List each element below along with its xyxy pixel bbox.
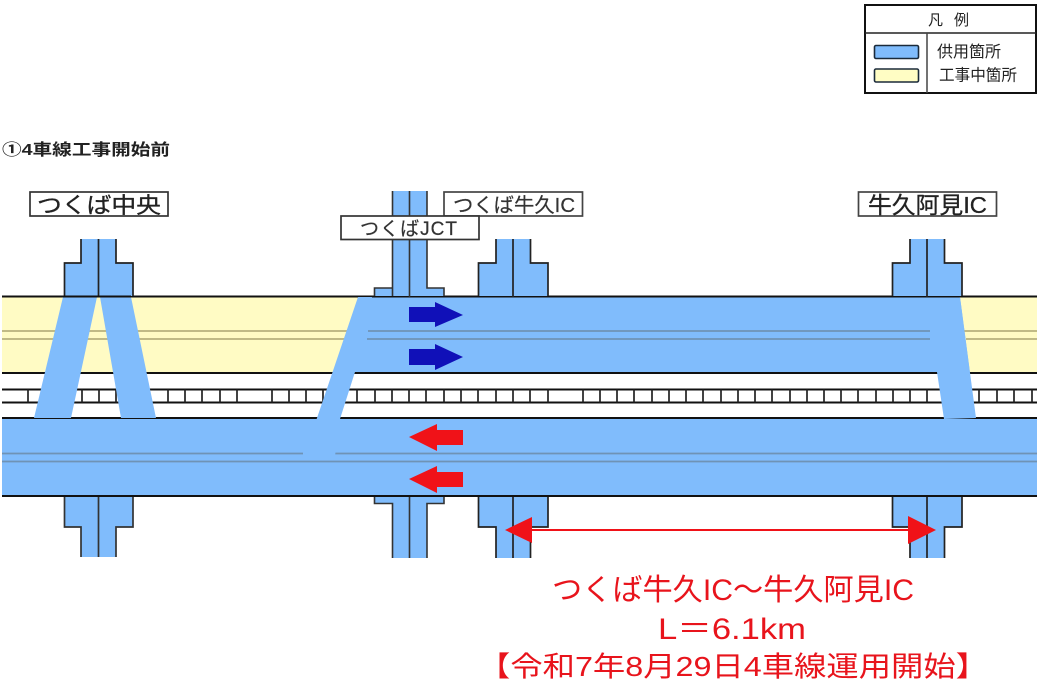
label: つくばJCT: つくばJCT bbox=[360, 218, 457, 240]
callout: section, length and opening date bbox=[478, 574, 988, 682]
interchange: 牛久阿見IC north outline bbox=[892, 239, 962, 297]
legend swatch: in service bbox=[874, 46, 918, 58]
junction: つくばJCT north outline bbox=[374, 191, 444, 297]
crossover ramp: つくば中央 right bbox=[100, 297, 156, 418]
crossover ramp: つくばJCT bbox=[304, 297, 372, 456]
carriageway edge lines bbox=[2, 296, 1037, 496]
junction: つくばJCT north fill bbox=[374, 191, 444, 296]
interchange: つくば中央 north outline bbox=[64, 239, 133, 297]
section span arrow bbox=[505, 516, 936, 544]
heading: ①4車線工事開始前 bbox=[2, 140, 170, 159]
legend swatch: under construction bbox=[874, 69, 918, 82]
label: つくば牛久IC: つくば牛久IC bbox=[453, 194, 575, 217]
interchange: 牛久阿見IC south fill bbox=[892, 497, 962, 558]
median bbox=[2, 390, 1037, 402]
road plan bbox=[2, 191, 1037, 558]
junction: つくばJCT south fill bbox=[374, 497, 444, 558]
direction arrow: westbound lane 1 bbox=[409, 424, 463, 451]
in-service upper carriageway bbox=[355, 297, 970, 373]
interchange: つくば牛久IC south outline bbox=[478, 497, 548, 558]
legend label: under construction: 工事中箇所 bbox=[939, 66, 1017, 84]
interchange: つくば牛久IC north outline bbox=[478, 239, 548, 297]
interchange: つくば中央 south fill bbox=[64, 497, 133, 557]
interchange: 牛久阿見IC south outline bbox=[892, 497, 962, 558]
legend bbox=[865, 5, 1036, 93]
callout line: opening date: 【令和7年8月29日4車線運用開始】 bbox=[478, 651, 988, 682]
direction arrow: eastbound lane 1 bbox=[409, 302, 463, 327]
legend title: 凡 例 bbox=[928, 12, 969, 29]
label: つくば中央: つくば中央 bbox=[37, 193, 161, 218]
interchange: つくば中央 north fill bbox=[64, 239, 133, 296]
legend label: in service: 供用箇所 bbox=[937, 43, 1001, 61]
crossover ramp: つくば中央 left bbox=[34, 297, 97, 418]
junction: つくばJCT south outline bbox=[374, 497, 444, 558]
callout line: length: L＝6.1km bbox=[658, 613, 806, 646]
direction arrow: westbound lane 2 bbox=[409, 466, 463, 493]
upper carriageway top edge over ramps bbox=[63, 296, 131, 298]
construction carriageway (yellow) bbox=[2, 297, 1037, 373]
interchange: 牛久阿見IC north fill bbox=[892, 239, 962, 296]
interchange: つくば中央 south outline bbox=[64, 497, 133, 557]
interchange: つくば牛久IC south fill bbox=[478, 497, 548, 558]
label: つくばJCT bbox=[341, 216, 479, 240]
callout line: section: つくば牛久IC～牛久阿見IC bbox=[552, 574, 914, 607]
lane lines, lower carriageway bbox=[2, 454, 1037, 462]
lane lines, upper carriageway bbox=[2, 331, 1037, 339]
interchange: つくば牛久IC north fill bbox=[478, 239, 548, 296]
in-service lower carriageway bbox=[2, 418, 1037, 496]
crossover ramp: 牛久阿見IC bbox=[934, 297, 976, 419]
label: 牛久阿見IC: 牛久阿見IC bbox=[868, 192, 987, 218]
direction arrow: eastbound lane 2 bbox=[409, 344, 463, 370]
